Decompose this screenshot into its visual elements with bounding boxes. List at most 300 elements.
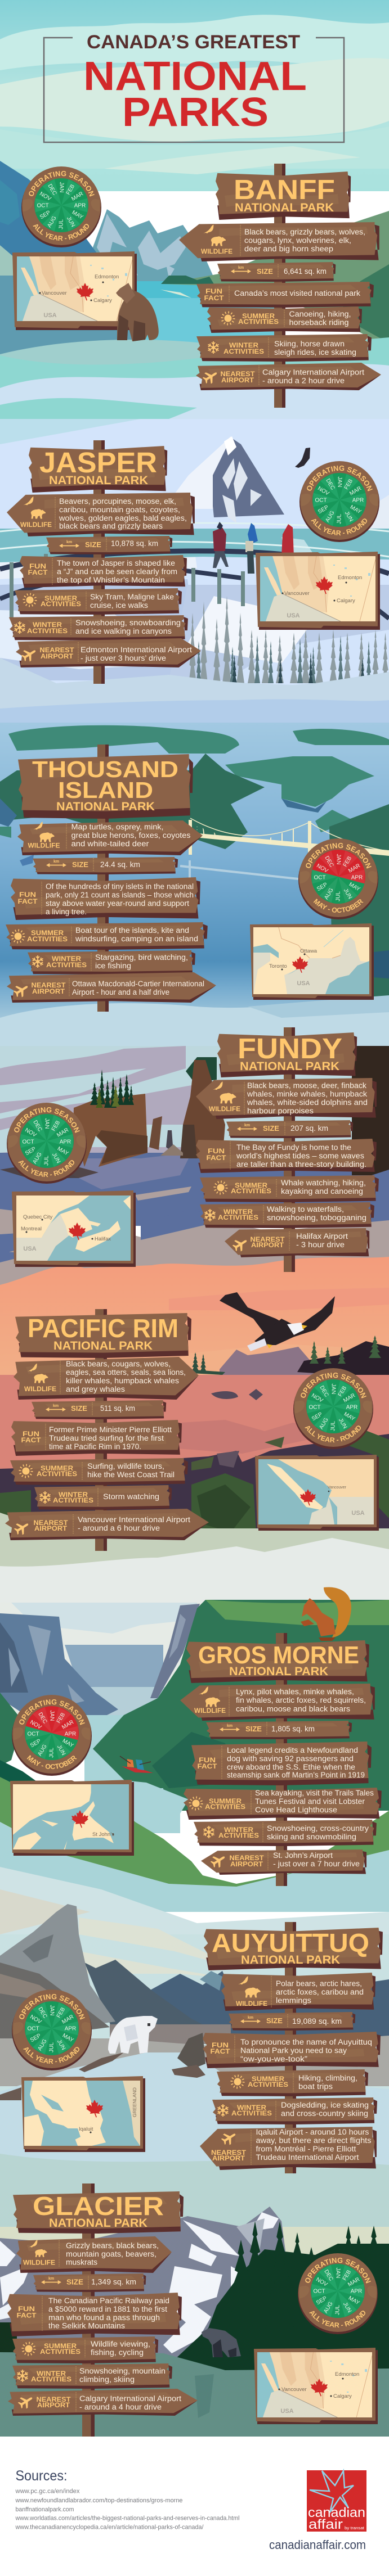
sign: winter activities: ACTIVITIES xyxy=(31,2375,71,2383)
panel: Glacier operating season badge: AUG xyxy=(323,2300,334,2315)
sign: summer activities: SUMMER xyxy=(242,312,275,320)
panel: Auyuittuq operating season badge: DEC xyxy=(37,2006,48,2019)
sign: nearest airport: AIRPORT xyxy=(221,376,254,384)
panel: Gros Morne operating season badge: OPERATING SEASON xyxy=(19,1699,85,1725)
sign: summer activities: Surfing, wildlife tours, xyxy=(87,1462,164,1470)
panel: Glacier map: Vancouver xyxy=(281,2386,307,2393)
panel: Fundy map: Montreal xyxy=(21,1226,42,1232)
sign: summer activities: hike the West Coast Trail xyxy=(87,1470,175,1479)
panel: Banff map: Vancouver xyxy=(42,290,67,296)
sign: Fundy title xyxy=(217,1032,357,1077)
panel: Banff operating season badge: MAR xyxy=(70,191,84,202)
sign: winter activities: climbing, skiing xyxy=(79,2375,135,2384)
panel: Jasper operating season badge xyxy=(299,461,379,542)
sign: winter activities xyxy=(194,1820,377,1846)
sign: size: SIZE xyxy=(263,1125,279,1133)
panel: Banff operating season badge: NOV xyxy=(38,191,52,202)
sign: winter activities: and cross-country skiing xyxy=(281,2109,368,2118)
panel: Jasper operating season badge: OCT xyxy=(315,497,327,504)
sign: size: 1,805 sq. km xyxy=(271,1725,315,1733)
sign: fun fact: Canada’s most visited national park xyxy=(234,289,360,297)
panel: Fundy operating season badge: FEB xyxy=(51,1120,61,1133)
trees on the flowerpot rock xyxy=(90,1070,134,1108)
panel: Glacier operating season badge: APR xyxy=(351,2289,362,2294)
panel: Thousand Island operating season badge: MAY xyxy=(348,882,361,893)
panel: Banff map: USA xyxy=(43,312,57,319)
panel: Thousand Island operating season badge: FEB xyxy=(342,855,353,868)
sign: Auyuittuq title xyxy=(204,1928,383,1970)
sign: fun fact: Of the hundreds of tiny islets in the national xyxy=(46,882,194,891)
sign: size: 6,641 sq. km xyxy=(284,267,327,276)
sign: summer activities: SUMMER xyxy=(44,2342,77,2350)
sign: nearest airport: AIRPORT xyxy=(251,1241,284,1249)
sign: fun fact: the top of Whistler’s Mountain xyxy=(57,576,165,584)
sign: fun fact: FUN xyxy=(212,2041,229,2049)
panel: Banff operating season badge xyxy=(21,166,101,247)
panel: Banff operating season badge: AUG xyxy=(46,215,58,229)
background: Jasper foreground snow xyxy=(0,658,389,742)
sign: wildlife: black bears and grizzly bears xyxy=(59,522,163,530)
sign: wildlife xyxy=(221,1973,375,2011)
sign: winter activities: ACTIVITIES xyxy=(53,1496,93,1504)
sign: nearest airport: Calgary International Airport xyxy=(262,368,364,377)
sign: winter activities: skiing and snowmobiling xyxy=(267,1833,356,1841)
sign: summer activities xyxy=(184,1788,382,1820)
sign: Glacier title xyxy=(13,2191,184,2234)
panel: Fundy operating season badge: MAY xyxy=(56,1146,70,1157)
sign: wildlife: WILDLIFE xyxy=(28,841,60,849)
panel: Auyuittuq operating season badge: JUN xyxy=(56,2038,66,2051)
panel: Thousand Island map: Toronto xyxy=(269,963,287,969)
sign: nearest airport: Iqaluit Airport - around 10 hours xyxy=(256,2128,369,2136)
sign: summer activities: Sky Tram, Maligne Lake xyxy=(90,593,174,601)
panel: Jasper signpost xyxy=(7,440,201,684)
sign: wildlife xyxy=(14,1357,199,1400)
panel: Jasper map: USA xyxy=(287,612,300,619)
panel: Gros Morne operating season badge: MAY - OCTOBER xyxy=(27,1755,77,1769)
sign: nearest airport: AIRPORT xyxy=(34,1524,68,1532)
sign: fun fact: a living tree. xyxy=(46,908,87,916)
sign: wildlife xyxy=(180,1684,375,1721)
sign: nearest airport: NEAREST xyxy=(39,646,74,654)
panel: Banff operating season badge: OPERATING SEASON xyxy=(29,171,95,197)
panel: Pacific Rim operating season badge: FEB xyxy=(337,1385,348,1398)
sign: nearest airport: Vancouver International Airport xyxy=(78,1515,190,1524)
background: Auyuittuq mountains and ice xyxy=(0,1904,389,2193)
panel: Jasper operating season badge: APR xyxy=(352,497,364,504)
panel: Jasper map: Edmonton xyxy=(338,575,362,581)
sign: nearest airport: - around a 6 hour drive xyxy=(78,1524,160,1532)
panel: Thousand Island operating season badge: JUL xyxy=(336,891,341,901)
sign: fun fact: are taller than a three-story building. xyxy=(236,1160,366,1169)
sign: fun fact xyxy=(20,555,187,588)
sign: winter activities: ACTIVITIES xyxy=(46,961,87,969)
panel: Glacier map xyxy=(254,2348,378,2424)
panel: Pacific Rim operating season badge xyxy=(293,1368,373,1449)
sign: winter activities: WINTER xyxy=(229,341,258,349)
sign: winter activities: WINTER xyxy=(237,2104,266,2112)
panel: Jasper operating season badge: AUG xyxy=(324,509,336,524)
sign: nearest airport: - 3 hour drive xyxy=(296,1240,345,1249)
sign: wildlife xyxy=(17,820,203,855)
sign: wildlife: cougars, lynx, wolverines, elk, xyxy=(244,236,351,245)
sign: wildlife: Black bears, moose, deer, finback xyxy=(247,1081,366,1090)
panel: Fundy operating season badge: JUN xyxy=(51,1152,61,1165)
sign: wildlife xyxy=(179,222,379,261)
background: Fundy sky and rocks xyxy=(0,1046,389,1305)
sign: wildlife xyxy=(196,1078,377,1119)
panel: Pacific Rim map: Vancouver xyxy=(328,1486,347,1490)
sign: fun fact: FUN xyxy=(19,891,36,899)
sign: summer activities: ACTIVITIES xyxy=(248,2081,288,2088)
panel: Glacier operating season badge: DEC xyxy=(323,2269,334,2282)
sign: summer activities: kayaking and canoeing xyxy=(281,1187,363,1195)
panel: Gros Morne operating season badge: SEP xyxy=(29,1738,42,1749)
sign: fun fact xyxy=(196,1139,377,1173)
sign: size: km xyxy=(248,2016,253,2020)
panel: Auyuittuq operating season badge: AUG xyxy=(37,2038,48,2052)
panel: Jasper operating season badge: MAY xyxy=(349,504,363,516)
sign: size: 1,349 sq. km xyxy=(91,2277,136,2286)
sign: wildlife: Map turtles, osprey, mink, xyxy=(71,823,163,831)
panel: Pacific Rim operating season badge: JUL xyxy=(330,1421,337,1431)
sign: wildlife: arctic foxes, caribou and xyxy=(276,1988,364,1996)
panel: Thousand Island operating season badge: OPERATING SEASON xyxy=(306,843,372,869)
sign: Gros Morne title: GROS MORNE xyxy=(198,1641,359,1669)
brown bear xyxy=(116,283,159,341)
sign: nearest airport: NEAREST xyxy=(211,2149,247,2157)
sign: fun fact: “ow-you-we-took” xyxy=(240,2055,307,2063)
sign: Auyuittuq title: AUYUITTUQ xyxy=(212,1928,369,1957)
panel: Pacific Rim operating season badge: JUN xyxy=(337,1417,348,1430)
panel: Pacific Rim operating season badge: OCT xyxy=(308,1405,321,1410)
sign: winter activities: WINTER xyxy=(33,621,62,629)
sign: winter activities: WINTER xyxy=(224,1826,253,1834)
sign: summer activities: ACTIVITIES xyxy=(40,2348,81,2356)
sign: winter activities: Snowshoeing, mountain xyxy=(79,2367,166,2375)
sign: fun fact: FUN xyxy=(208,1147,225,1155)
sign: nearest airport: NEAREST xyxy=(230,1854,264,1862)
sign: nearest airport: AIRPORT xyxy=(230,1860,263,1868)
sign: fun fact: park, only 21 count as islands – those which xyxy=(46,891,194,899)
sign: fun fact: Trudeau tried surfing for the first xyxy=(49,1434,164,1442)
panel: Glacier operating season badge xyxy=(298,2253,378,2334)
panel: Pacific Rim operating season badge: JAN xyxy=(330,1384,337,1394)
sign: summer activities xyxy=(10,1458,188,1485)
sign: size: SIZE xyxy=(72,861,88,869)
sign: summer activities: windsurfing, camping on an island xyxy=(75,935,198,943)
sign: winter activities xyxy=(200,1202,374,1228)
sign: summer activities: SUMMER xyxy=(31,929,64,937)
sign: size: 24.4 sq. km xyxy=(100,860,140,869)
sign: nearest airport: - around a 4 hour drive xyxy=(79,2403,162,2411)
sign: fun fact: The town of Jasper is shaped like xyxy=(57,559,175,567)
sign: winter activities: ACTIVITIES xyxy=(218,1831,259,1839)
panel: Auyuittuq operating season badge: MAY xyxy=(61,2033,75,2044)
panel: Fundy operating season badge: JUL xyxy=(44,1156,50,1166)
panel: Auyuittuq operating season badge: JUL xyxy=(48,2042,55,2052)
sign: Thousand Island title xyxy=(18,754,193,819)
panel: Jasper map: Calgary xyxy=(337,598,355,604)
panel: Jasper operating season badge: FEB xyxy=(343,478,354,491)
sign: fun fact: the Selkirk Mountains xyxy=(48,2321,125,2330)
panel: Fundy operating season badge: NOV xyxy=(24,1127,38,1139)
panel: Glacier operating season badge: MAR xyxy=(347,2276,361,2288)
sign: winter activities: Snowshoeing, cross-country xyxy=(267,1824,369,1833)
sign: fun fact: FACT xyxy=(197,1762,217,1770)
sign: fun fact: FACT xyxy=(17,2311,37,2319)
forest xyxy=(225,2221,387,2335)
sign: summer activities: SUMMER xyxy=(235,1181,267,1189)
sign: nearest airport: NEAREST xyxy=(250,1235,285,1243)
sign: nearest airport: from Montréal - Pierre Elliott xyxy=(256,2145,356,2153)
sign: size: SIZE xyxy=(257,268,273,276)
sign: winter activities xyxy=(9,615,188,640)
panel: Glacier operating season badge: SEP xyxy=(315,2295,328,2306)
panel: Glacier signpost xyxy=(7,2183,198,2437)
sign: fun fact xyxy=(203,2032,381,2068)
sign: summer activities: Canoeing, hiking, xyxy=(289,310,351,318)
panel: Fundy operating season badge: OCT xyxy=(22,1139,34,1145)
panel: Pacific Rim operating season badge: AUG xyxy=(318,1416,330,1431)
sign: nearest airport: NEAREST xyxy=(36,2395,71,2403)
sign: winter activities xyxy=(196,334,372,362)
sign: Gros Morne title xyxy=(186,1640,369,1683)
sign: nearest airport: Trudeau International Airport xyxy=(256,2153,359,2162)
sign: Auyuittuq title: NATIONAL PARK xyxy=(241,1954,340,1966)
sign: summer activities xyxy=(207,306,362,333)
sign: summer activities: horseback riding xyxy=(289,318,349,327)
sign: summer activities: ACTIVITIES xyxy=(41,600,81,608)
panel: Auyuittuq operating season badge: NOV xyxy=(29,2014,43,2025)
panel: Glacier operating season badge: JUN xyxy=(342,2301,352,2314)
panel: Gros Morne operating season badge: FEB xyxy=(56,1712,66,1725)
panel: Thousand Island operating season badge: MAY - OCTOBER xyxy=(313,899,364,913)
sign: fun fact: FACT xyxy=(28,569,48,576)
panel: Fundy operating season badge: JAN xyxy=(44,1118,50,1129)
sign: fun fact: world’s highest tides – some waves xyxy=(236,1152,364,1160)
sign: summer activities: SUMMER xyxy=(41,1464,73,1472)
sign: wildlife: Lynx, pilot whales, minke whales, xyxy=(236,1688,354,1696)
background: Pacific Rim sky and shore xyxy=(0,1257,389,1608)
background: Gros Morne fjord xyxy=(0,1600,389,1968)
panel: Pacific Rim operating season badge: APR xyxy=(346,1405,357,1410)
title block xyxy=(44,31,344,142)
panel: Gros Morne operating season badge: MAY xyxy=(61,1738,75,1749)
sign: summer activities: cruise, ice walks xyxy=(90,601,148,610)
sign: fun fact: Local legend credits a Newfoundland xyxy=(227,1746,358,1754)
sign: wildlife: WILDLIFE xyxy=(20,521,52,529)
sign: nearest airport xyxy=(8,2389,198,2416)
panel: Auyuittuq operating season badge: OPERATING SEASON xyxy=(19,1994,85,2020)
sign: size: km xyxy=(48,2277,54,2281)
sign: size: 10,878 sq. km xyxy=(111,539,158,548)
sign: summer activities: ACTIVITIES xyxy=(231,1187,271,1195)
sign: Pacific Rim title xyxy=(15,1313,191,1358)
panel: Gros Morne operating season badge: JUN xyxy=(56,1744,66,1757)
sign: size: km xyxy=(244,1124,250,1127)
panel: Glacier map: Calgary xyxy=(333,2393,352,2399)
sign: winter activities: ACTIVITIES xyxy=(27,627,68,635)
panel: Auyuittuq operating season badge: ALL YEAR - ROUND xyxy=(23,2047,79,2064)
sign: winter activities: Walking to waterfalls, xyxy=(267,1205,344,1213)
sign: winter activities: WINTER xyxy=(37,2370,66,2378)
title: National: NATIONAL xyxy=(83,54,307,99)
sign: nearest airport: St. John’s Airport xyxy=(273,1851,333,1860)
sign: winter activities: Stargazing, bird watching, xyxy=(95,953,188,962)
panel: Thousand Island map: Ottawa xyxy=(300,948,318,954)
sign: wildlife: caribou, moose and black bears xyxy=(236,1705,350,1713)
sign: nearest airport xyxy=(200,2127,377,2170)
sign: size: SIZE xyxy=(245,1725,262,1733)
panel: Jasper operating season badge: JUN xyxy=(343,510,354,523)
sign: winter activities: Dogsledding, ice skating xyxy=(281,2101,369,2109)
polar bear xyxy=(108,2016,158,2054)
panel: Thousand Island operating season badge: AUG xyxy=(323,887,335,901)
footer white panel background xyxy=(0,2437,389,2576)
panel: Gros Morne operating season badge xyxy=(12,1695,92,1776)
sign: nearest airport: - around a 2 hour drive xyxy=(262,377,345,385)
sign: fun fact: FACT xyxy=(211,2047,230,2055)
sign: wildlife: Beavers, porcupines, moose, elk, xyxy=(59,497,176,506)
sign: fun fact xyxy=(196,282,374,308)
sign: winter activities: ACTIVITIES xyxy=(223,348,264,355)
sign: wildlife: WILDLIFE xyxy=(201,247,232,255)
sign: winter activities: ACTIVITIES xyxy=(231,2109,272,2117)
panel: Fundy operating season badge xyxy=(7,1103,87,1184)
panel: Banff operating season badge: APR xyxy=(74,202,86,209)
panel: Auyuittuq operating season badge xyxy=(12,1989,92,2070)
sign: nearest airport xyxy=(196,363,381,390)
panel: Thousand Island operating season badge: JUN xyxy=(342,887,353,900)
sign: nearest airport: AIRPORT xyxy=(37,2401,70,2409)
sign: size: km xyxy=(238,266,244,270)
title: Canada's Greatest: CANADA’S GREATEST xyxy=(87,31,300,53)
sign: Jasper title xyxy=(29,446,167,493)
sign: size: 19,089 sq. km xyxy=(292,2017,342,2025)
red squirrel xyxy=(301,1587,351,1641)
sign: wildlife: Grizzly bears, black bears, xyxy=(66,2241,159,2250)
sign: Glacier title: NATIONAL PARK xyxy=(49,2217,147,2230)
sign: nearest airport: away, but there are direct flights xyxy=(256,2136,372,2145)
panel: Jasper operating season badge: SEP xyxy=(317,504,330,515)
panel: Glacier operating season badge: OCT xyxy=(313,2289,325,2294)
sign: fun fact: Former Prime Minister Pierre Elliott xyxy=(49,1425,172,1434)
sign: winter activities: Snowshoeing, snowboarding xyxy=(75,619,181,627)
panel: Glacier operating season badge: ALL YEAR - ROUND xyxy=(309,2311,365,2328)
sign: fun fact: The Canadian Pacific Railway paid xyxy=(48,2297,169,2305)
panel: Banff operating season badge: OCT xyxy=(37,202,49,209)
background: Banff mountains and lake xyxy=(0,161,389,439)
panel: Auyuittuq operating season badge: SEP xyxy=(29,2033,42,2043)
sign: summer activities: Tunes Festival and visit Lobster xyxy=(255,1797,365,1806)
sign: nearest airport: AIRPORT xyxy=(32,987,65,995)
panel: Auyuittuq operating season badge: OCT xyxy=(27,2025,39,2032)
panel: Fundy operating season badge: DEC xyxy=(32,1120,43,1133)
sign: wildlife: Polar bears, arctic hares, xyxy=(276,1979,362,1988)
sign: winter activities xyxy=(12,2363,172,2389)
panel: Jasper operating season badge: DEC xyxy=(324,478,336,491)
sign: wildlife: WILDLIFE xyxy=(194,1707,226,1715)
sign: wildlife: mountain goats, beavers, xyxy=(66,2250,157,2258)
panel: Glacier operating season badge: JUL xyxy=(334,2305,341,2315)
sign: winter activities xyxy=(34,1485,172,1510)
Canadian Affair logo: affair xyxy=(308,2517,343,2532)
sign: nearest airport: NEAREST xyxy=(221,370,255,378)
Canadian Affair logo xyxy=(307,2470,366,2532)
sign: Fundy title: FUNDY xyxy=(238,1032,342,1064)
panel: Thousand Island operating season badge: APR xyxy=(351,875,363,881)
sign: nearest airport: Ottawa Macdonald-Cartier International xyxy=(72,980,204,988)
sign: size: SIZE xyxy=(85,541,101,549)
Canadian Affair logo: canadian xyxy=(308,2505,365,2520)
panel: Auyuittuq operating season badge: APR xyxy=(65,2025,76,2032)
kayakers xyxy=(120,1756,153,1773)
sign: wildlife: WILDLIFE xyxy=(23,2258,55,2266)
sign: wildlife: wolves, golden eagles, bald eagles, xyxy=(59,514,187,522)
panel: Jasper operating season badge: MAR xyxy=(348,485,363,497)
sign: wildlife xyxy=(16,2236,172,2273)
panel: Banff map: Edmonton xyxy=(95,274,119,280)
sign: fun fact: a $5000 reward in 1881 to the first xyxy=(48,2305,167,2313)
sign: size: km xyxy=(53,860,59,864)
sign: wildlife: muskrats xyxy=(66,2258,97,2266)
panel: Fundy operating season badge: OPERATING SEASON xyxy=(14,1107,80,1133)
sign: wildlife: WILDLIFE xyxy=(236,2000,267,2007)
sign: wildlife: Black bears, grizzly bears, wolves, xyxy=(244,228,365,236)
sources list: Sources: xyxy=(16,2468,68,2484)
sign: summer activities: ACTIVITIES xyxy=(27,935,68,943)
sign: fun fact: FUN xyxy=(205,287,222,295)
sign: fun fact xyxy=(7,2293,182,2336)
sign: wildlife: lemmings xyxy=(276,1996,311,2005)
sign: summer activities xyxy=(217,2069,368,2096)
sign: size: 511 sq. km xyxy=(100,1404,135,1413)
sign: fun fact: stay above water year-round and support xyxy=(46,899,189,908)
sign: wildlife: WILDLIFE xyxy=(209,1105,240,1113)
sign: winter activities xyxy=(212,2097,377,2124)
panel: Thousand Island operating season badge xyxy=(298,838,378,919)
sign: fun fact xyxy=(11,1420,182,1456)
sign: fun fact: FUN xyxy=(18,2305,35,2313)
panel: Gros Morne operating season badge: OCT xyxy=(27,1731,39,1738)
sign: nearest airport xyxy=(16,638,201,667)
sign: nearest airport: Halifax Airport xyxy=(296,1232,348,1240)
sign: size: km xyxy=(66,540,72,544)
title frame xyxy=(44,38,344,142)
panel: Jasper operating season badge: ALL YEAR - ROUND xyxy=(311,518,367,535)
website address: canadianaffair.com xyxy=(269,2538,366,2552)
sign: wildlife: and grey whales xyxy=(66,1385,125,1393)
sign: nearest airport xyxy=(7,972,216,1003)
panel: Banff operating season badge: MAY xyxy=(71,210,84,221)
panel: Fundy map xyxy=(12,1190,136,1267)
sign: size: SIZE xyxy=(266,2017,283,2025)
panel: Thousand Island map: USA xyxy=(297,980,310,987)
sign: fun fact: The Bay of Fundy is home to the xyxy=(236,1143,351,1152)
sign: Fundy title: NATIONAL PARK xyxy=(240,1060,339,1073)
sign: summer activities: Hiking, climbing, xyxy=(298,2074,357,2082)
panel: Fundy operating season badge: ALL YEAR - ROUND xyxy=(18,1160,74,1178)
sign: fun fact xyxy=(191,1742,372,1785)
panel: Glacier operating season badge: FEB xyxy=(342,2269,352,2282)
panel: Auyuittuq map xyxy=(21,2076,145,2152)
sign: nearest airport: Calgary International Airport xyxy=(79,2394,181,2403)
sign: wildlife: great blue herons, foxes, coyotes xyxy=(71,831,191,840)
sign: summer activities: boat trips xyxy=(298,2082,333,2091)
panel: Fundy map: Quebec City xyxy=(23,1214,53,1220)
background: Thousand Island water and islands xyxy=(0,723,389,1057)
